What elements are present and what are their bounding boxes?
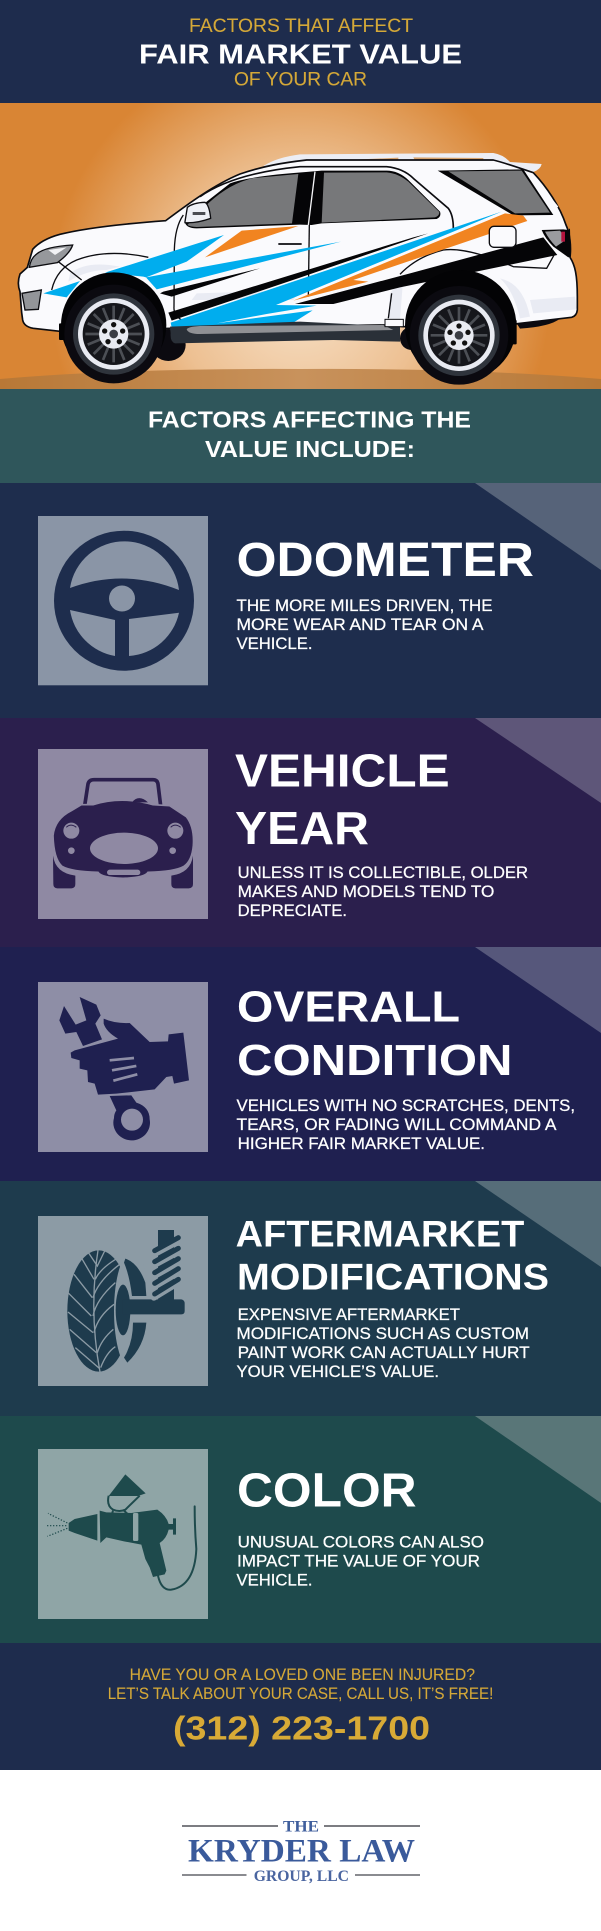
text: aftermarket description: MODIFICATIONS SUCH AS CUSTOM [236, 1324, 529, 1343]
hero panel with car illustration [0, 103, 601, 389]
icon: classic car [38, 749, 208, 919]
panel: color [0, 1416, 601, 1643]
logo: Kryder Law Group: THE [283, 1819, 319, 1836]
logo: Kryder Law Group [0, 1770, 601, 1931]
heading: aftermarket modifications [236, 1214, 549, 1297]
text: aftermarket description [236, 1305, 530, 1381]
logo: Kryder Law Group: KRYDER LAW [188, 1834, 415, 1870]
heading: aftermarket modifications: AFTERMARKET [236, 1214, 525, 1255]
icon: tire and suspension spring [38, 1216, 208, 1386]
text: aftermarket description: PAINT WORK CAN ACTUALLY HURT [238, 1343, 530, 1362]
header line: factors that affect: FACTORS THAT AFFECT [189, 16, 413, 37]
heading: vehicle year: VEHICLE [235, 745, 450, 797]
text: color description: IMPACT THE VALUE OF YOUR [237, 1552, 480, 1571]
text: color description: UNUSUAL COLORS CAN ALSO [238, 1533, 484, 1552]
panel: overall condition [0, 947, 601, 1181]
text: odometer description: MORE WEAR AND TEAR ON A [236, 615, 484, 634]
phone number: (312) 223-1700 [173, 1709, 430, 1746]
heading: overall condition: OVERALL [237, 983, 460, 1032]
section heading band [0, 389, 601, 483]
heading: aftermarket modifications: MODIFICATIONS [237, 1256, 549, 1297]
text: vehicle year description [238, 863, 528, 920]
heading line two: VALUE INCLUDE: [205, 436, 415, 462]
heading: overall condition [237, 983, 512, 1085]
heading: vehicle year [235, 745, 450, 854]
text: overall condition description [236, 1096, 575, 1153]
callout text: LET’S TALK ABOUT YOUR CASE, CALL US, IT’S FREE! [108, 1685, 493, 1703]
text: vehicle year description: MAKES AND MODELS TEND TO [238, 882, 494, 901]
text: aftermarket description: YOUR VEHICLE’S VALUE. [236, 1362, 439, 1381]
text: overall condition description: TEARS, OR FADING WILL COMMAND A [236, 1115, 557, 1134]
text: aftermarket description: EXPENSIVE AFTERMARKET [238, 1305, 460, 1324]
callout text [108, 1666, 493, 1703]
heading line one: FACTORS AFFECTING THE [148, 407, 471, 433]
text: color description [236, 1533, 484, 1590]
callout text: HAVE YOU OR A LOVED ONE BEEN INJURED? [130, 1666, 475, 1684]
heading: odometer: ODOMETER [236, 534, 534, 587]
text: vehicle year description: DEPRECIATE. [238, 901, 347, 920]
illustration: SUV with racing stripes [18, 153, 577, 385]
heading: overall condition: CONDITION [237, 1036, 512, 1085]
heading: vehicle year: YEAR [235, 802, 369, 854]
icon: hand with wrench [38, 982, 208, 1152]
text: overall condition description: VEHICLES WITH NO SCRATCHES, DENTS, [236, 1096, 575, 1115]
header line: of your car: OF YOUR CAR [234, 70, 367, 91]
panel: odometer [0, 483, 601, 718]
panel: aftermarket modifications [0, 1181, 601, 1416]
header banner [0, 0, 601, 103]
icon: steering wheel [38, 516, 208, 685]
text: vehicle year description: UNLESS IT IS COLLECTIBLE, OLDER [238, 863, 528, 882]
text: odometer description: THE MORE MILES DRIVEN, THE [236, 596, 492, 615]
text: odometer description [236, 596, 492, 653]
text: color description: VEHICLE. [236, 1571, 312, 1590]
text: odometer description: VEHICLE. [236, 634, 312, 653]
logo: Kryder Law Group: GROUP, LLC [254, 1868, 349, 1885]
heading: color: COLOR [237, 1465, 417, 1518]
text: overall condition description: HIGHER FAIR MARKET VALUE. [238, 1134, 485, 1153]
title: fair market value: FAIR MARKET VALUE [139, 38, 462, 69]
icon: spray paint gun [38, 1449, 208, 1619]
panel: vehicle year [0, 718, 601, 947]
call to action band [0, 1643, 601, 1770]
